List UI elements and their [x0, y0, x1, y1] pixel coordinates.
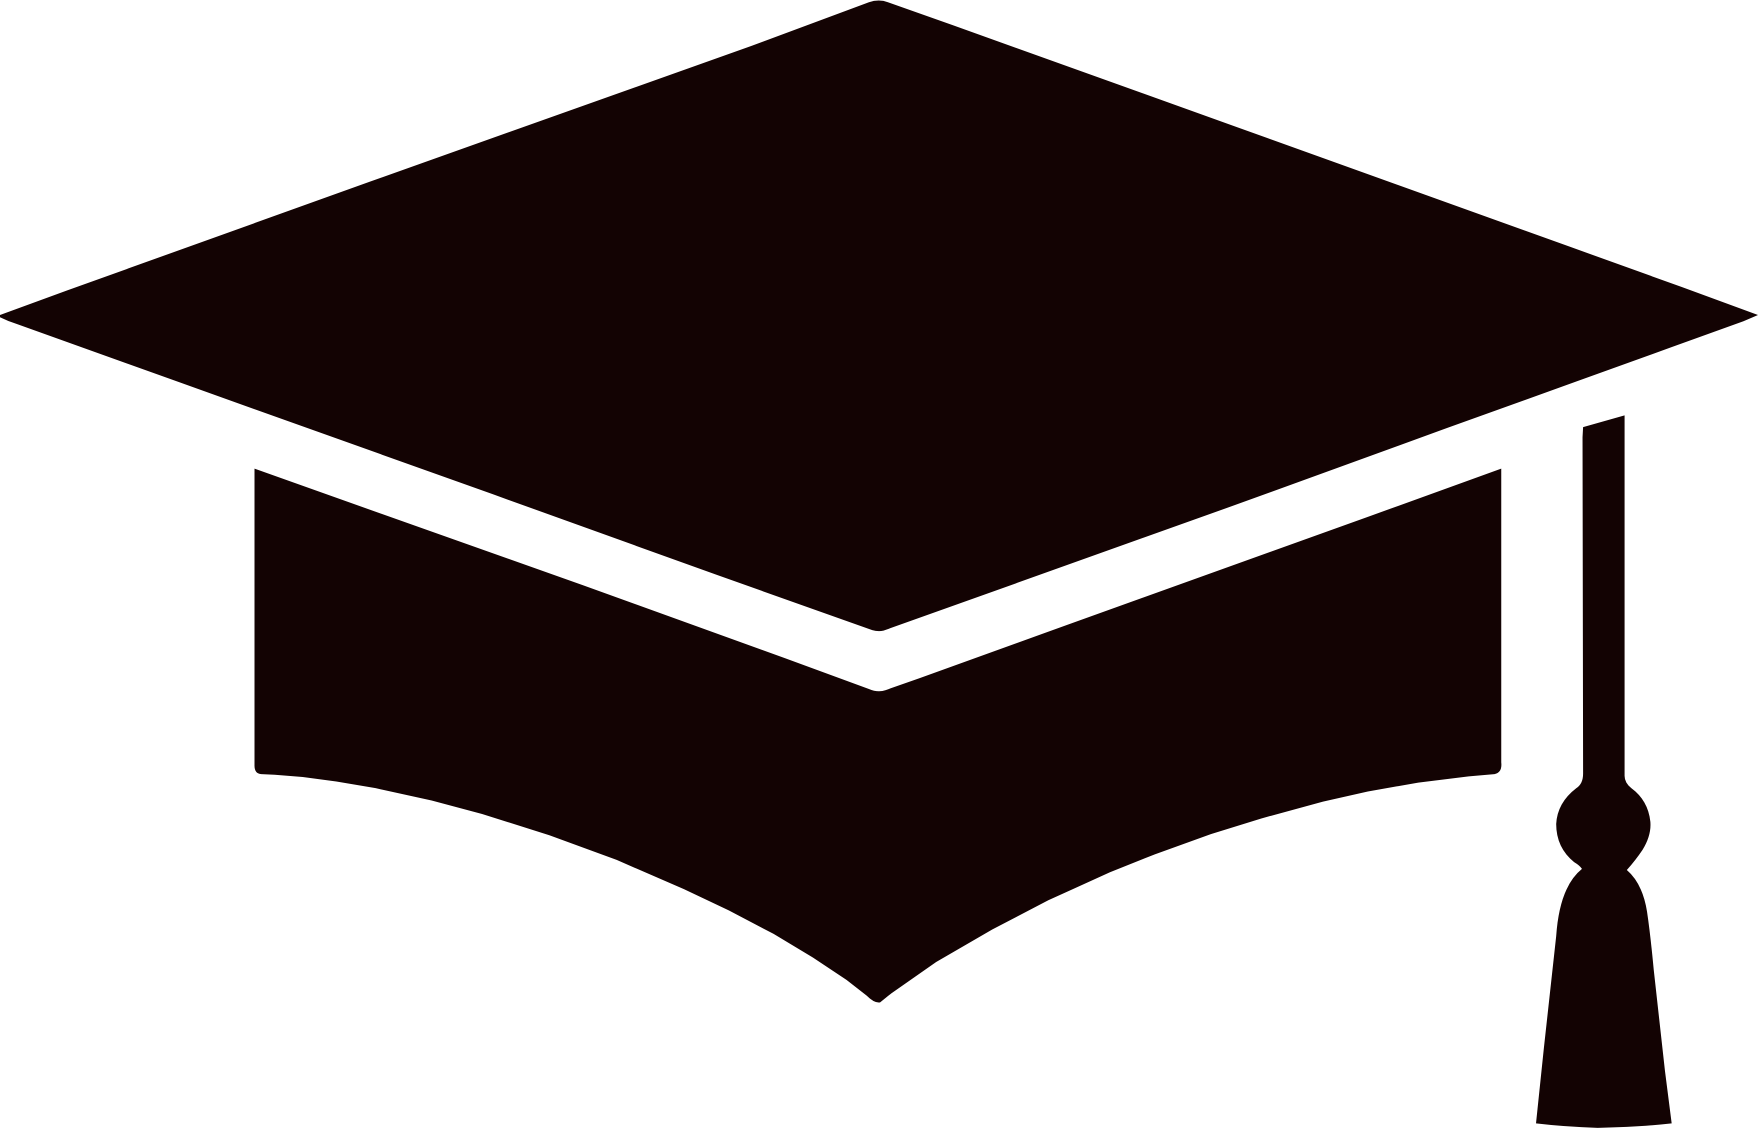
cap base	[255, 469, 1501, 1002]
tassel	[1536, 415, 1672, 1128]
cap top board	[0, 1, 1758, 631]
